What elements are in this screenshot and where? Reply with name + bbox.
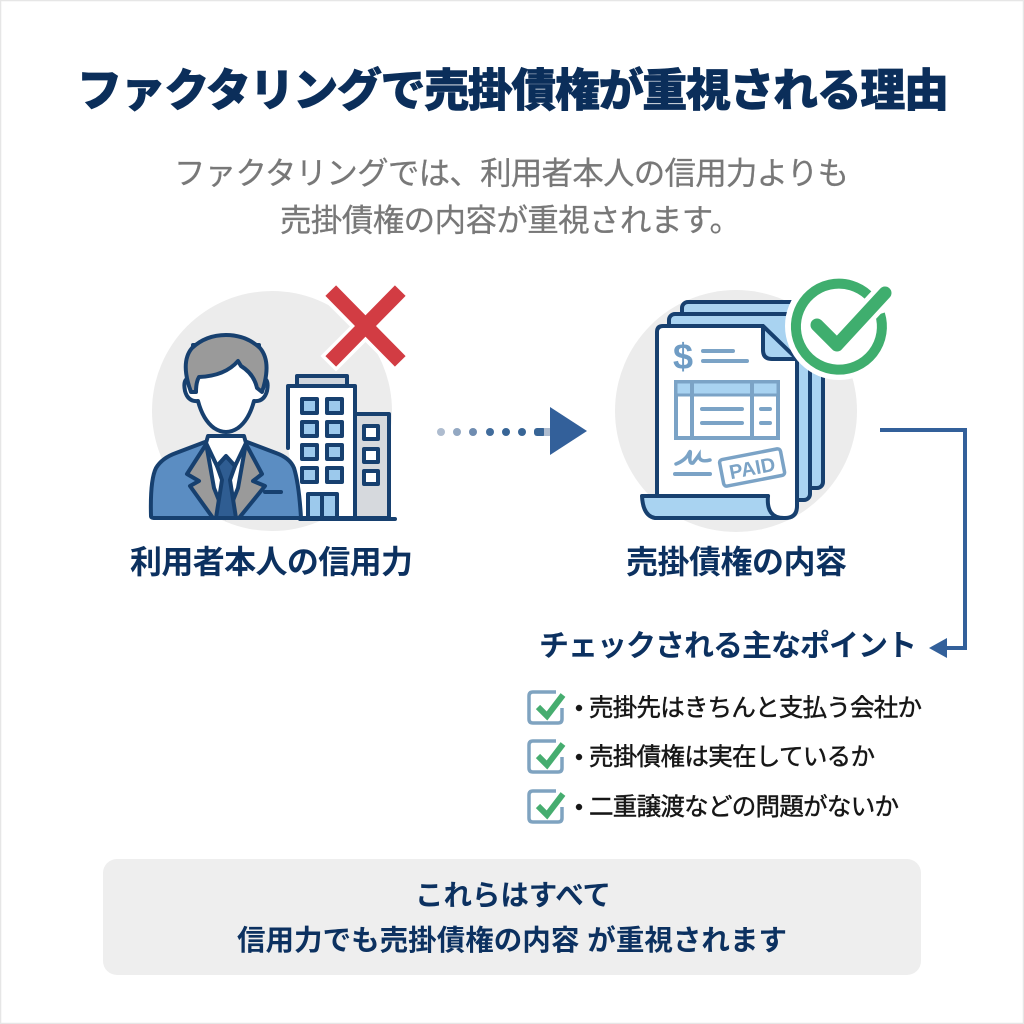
icon: person and building with red cross xyxy=(151,291,395,531)
icon: invoice documents with green check xyxy=(615,272,893,532)
invoice details xyxy=(673,336,785,487)
item 1: 売掛先はきちんと支払う会社か xyxy=(589,694,922,722)
invoice details: PAID xyxy=(728,454,777,484)
item 2: 売掛債権は実在しているか xyxy=(589,743,875,771)
callout: conclusion: 信用力でも売掛債権の内容 が重視されます xyxy=(237,924,787,957)
callout: conclusion: これらはすべて xyxy=(415,880,611,912)
subtitle text: 売掛債権の内容が重視されます。 xyxy=(280,202,741,238)
title: ファクタリングで売掛債権が重視される理由 xyxy=(77,65,949,116)
subtitle text: ファクタリングでは、利用者本人の信用力よりも xyxy=(174,155,849,191)
label: user credit: 利用者本人の信用力 xyxy=(130,544,413,580)
icon: green check circle xyxy=(785,272,893,380)
icon: businessman xyxy=(151,335,301,518)
invoice details: $ xyxy=(673,336,693,377)
label: receivable contents: 売掛債権の内容 xyxy=(626,544,847,580)
arrow: elbow to check points xyxy=(880,430,965,658)
heading: check points: チェックされる主なポイント xyxy=(539,630,917,663)
icon: building xyxy=(288,376,395,519)
icon: red cross xyxy=(336,296,395,356)
subtitle text xyxy=(174,155,849,238)
item 3: 二重譲渡などの問題がないか xyxy=(589,793,899,821)
arrow: dotted right arrow xyxy=(437,407,587,455)
checklist xyxy=(529,692,922,822)
callout: conclusion xyxy=(103,859,921,975)
